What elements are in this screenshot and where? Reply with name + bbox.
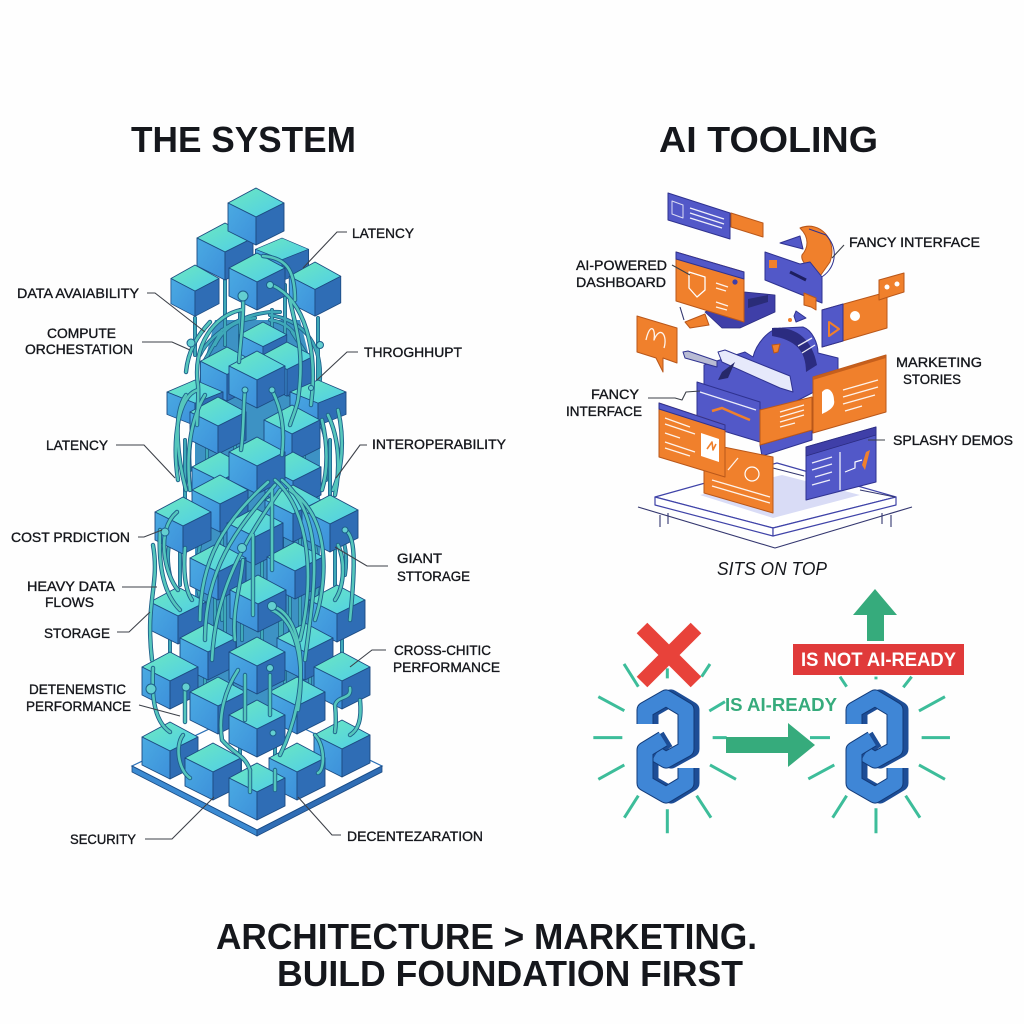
purple card and curved panel: [765, 226, 834, 322]
label: marketing stories: MARKETING: [896, 354, 982, 370]
ai-powered dashboard panel: [676, 252, 775, 328]
label: decentralization: DECENTEZARATION: [347, 828, 483, 844]
label: compute orchestration: COMPUTE: [47, 325, 116, 341]
conclusion text: BUILD FOUNDATION FIRST: [277, 953, 743, 994]
label: marketing stories: STORIES: [903, 371, 961, 387]
label: cost prediction: COST PRDICTION: [11, 529, 130, 545]
label: giant storage: STTORAGE: [397, 568, 470, 584]
label: ai-powered dashboard: AI-POWERED: [576, 257, 667, 273]
label: heavy data flows: FLOWS: [45, 594, 94, 610]
label: latency top: LATENCY: [352, 225, 415, 241]
left chain rays: [593, 664, 736, 833]
pedestal table: [638, 463, 912, 548]
sits on top caption: SITS ON TOP: [717, 559, 827, 579]
right chain icon: [854, 698, 900, 795]
label: data availability: [17, 285, 205, 332]
label: heavy data flows: HEAVY DATA: [27, 578, 116, 594]
is ai-ready label: IS AI-READY: [725, 695, 837, 715]
label: storage: [44, 612, 150, 641]
tube connectors: [146, 282, 348, 736]
label: fancy interface left: INTERFACE: [566, 403, 642, 419]
title: the system: THE SYSTEM: [131, 119, 356, 160]
label: throughput: [317, 344, 462, 380]
label: security: SECURITY: [70, 831, 137, 847]
label: storage: STORAGE: [44, 625, 110, 641]
back tubes: [168, 280, 346, 770]
central machine: [683, 327, 838, 420]
panel: system tower: [132, 188, 382, 836]
right video panel: [822, 273, 904, 347]
label: latency top: [303, 225, 415, 268]
label: giant storage: GIANT: [397, 550, 442, 566]
stacked data cubes: [142, 188, 370, 820]
is not ai-ready badge: [793, 644, 964, 675]
label: cross-chain performance: PERFORMANCE: [393, 659, 500, 675]
label: heavy data flows: [27, 578, 157, 610]
label: cross-chain performance: [350, 642, 500, 675]
label: giant storage: [335, 547, 470, 584]
panel: ai tooling illustration: [566, 193, 1013, 548]
orange bottom panel: [704, 443, 773, 513]
system labels: [11, 225, 507, 847]
marketing stories panels: [760, 355, 886, 456]
label: interoperability: INTEROPERABILITY: [372, 436, 507, 452]
panel: readiness comparison: [593, 589, 964, 833]
label: splashy demos: SPLASHY DEMOS: [893, 432, 1013, 448]
label: throughput: THROGHHUPT: [364, 344, 462, 360]
label: ai-powered dashboard: DASHBOARD: [576, 274, 666, 290]
label: deterministic performance: DETENEMSTIC: [29, 681, 126, 697]
label: data availability: DATA AVAIABILITY: [17, 285, 140, 301]
middle purple chart panel: [697, 382, 760, 442]
label: deterministic performance: PERFORMANCE: [26, 698, 131, 714]
label: latency left: [46, 437, 175, 478]
label: fancy interface left: FANCY: [591, 386, 640, 402]
orange front panel: [659, 403, 725, 477]
label: decentralization: [298, 797, 483, 844]
floating panel top: [668, 193, 763, 239]
label: compute orchestration: [25, 325, 190, 357]
label: fancy interface left: [566, 386, 700, 419]
label: ai-powered dashboard: [576, 257, 690, 290]
label: security: [70, 797, 214, 847]
conclusion text: [216, 916, 757, 994]
label: compute orchestration: ORCHESTATION: [25, 341, 133, 357]
label: marketing stories: [896, 354, 982, 387]
splashy demo panel and connector: [773, 427, 895, 500]
green up arrow: [853, 589, 897, 641]
orange speech bubble: [637, 316, 677, 372]
red x mark: [642, 628, 696, 682]
label: deterministic performance: [26, 681, 180, 716]
tower core: [195, 320, 320, 720]
label: fancy interface top: FANCY INTERFACE: [849, 234, 980, 250]
front tubes: [150, 256, 361, 792]
right chain rays: [808, 677, 950, 833]
left chain icon: [645, 698, 691, 795]
label: latency left: LATENCY: [46, 437, 109, 453]
conclusion text: ARCHITECTURE > MARKETING.: [216, 916, 757, 957]
is not ai-ready badge: IS NOT AI-READY: [801, 650, 956, 671]
label: cross-chain performance: CROSS-CHITIC: [394, 642, 491, 658]
label: interoperability: [336, 436, 507, 478]
label: fancy interface top: [832, 234, 980, 258]
green right arrow: [726, 723, 815, 767]
title: ai tooling: AI TOOLING: [659, 119, 878, 160]
tower base plate: [132, 706, 382, 836]
